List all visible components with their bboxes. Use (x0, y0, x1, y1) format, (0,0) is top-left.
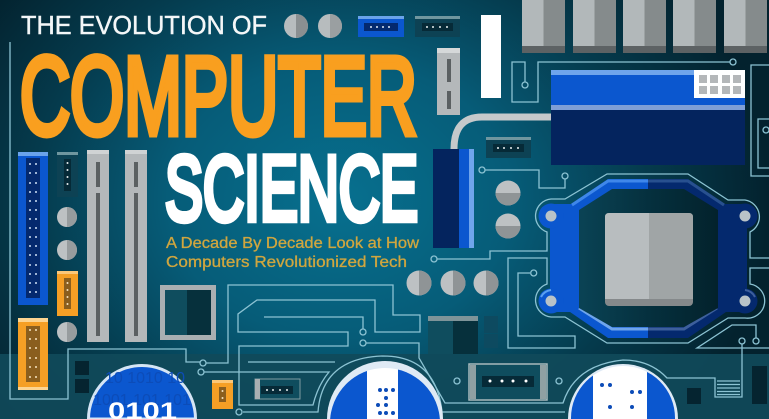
binary circle (88, 366, 196, 419)
mid dark connector (486, 137, 531, 158)
bottom connector centre (469, 364, 547, 400)
inner socket (579, 189, 718, 327)
CPU socket (538, 179, 758, 338)
square chip (160, 285, 216, 340)
navy frame right (648, 179, 758, 338)
binary circle: 10 1010 10 (105, 370, 185, 387)
title line: The Evolution Of: THE EVOLUTION OF (21, 10, 267, 40)
small teal squares (484, 316, 498, 348)
bottom circuit band (0, 354, 769, 419)
white bar component (481, 15, 501, 98)
title: Science: SCIENCE (165, 138, 418, 240)
large blue module (551, 70, 745, 165)
orange connector (57, 271, 78, 316)
blue ribbon connector (18, 152, 48, 305)
power pin block (694, 70, 745, 98)
large orange connector (18, 318, 48, 390)
tall grey slot 2 (125, 150, 147, 342)
small dark connector (415, 16, 460, 37)
capacitors: stacked pair (496, 180, 520, 238)
pin circle centre (327, 361, 443, 419)
capacitors: top pair (284, 14, 342, 38)
title: Computer: COMPUTER (20, 35, 417, 158)
pin circle right (568, 362, 678, 419)
CPU chip (605, 213, 693, 306)
chip with grey cap (428, 316, 478, 354)
subtitle (166, 235, 420, 271)
subtitle: A Decade By Decade Look at How (166, 235, 420, 252)
dark squares (75, 361, 89, 393)
capacitor column (57, 207, 77, 342)
binary circle: 1001 101 101 (93, 392, 191, 409)
navy vertical module (433, 149, 474, 248)
screw holes (546, 210, 750, 306)
frame highlights (541, 181, 755, 329)
grey pipe (454, 117, 551, 149)
dark squares right (687, 366, 767, 404)
capacitors: row of three (406, 270, 498, 296)
tall grey slot 1 (87, 150, 109, 342)
small orange connector (212, 380, 233, 409)
dark vertical connector (57, 152, 78, 197)
heat sink blocks (522, 0, 767, 53)
small grey socket (437, 48, 460, 115)
subtitle: Computers Revolutionized Tech (166, 254, 407, 271)
bottom connector left (255, 379, 300, 399)
blue frame left (538, 179, 648, 338)
small blue connector (358, 16, 404, 37)
